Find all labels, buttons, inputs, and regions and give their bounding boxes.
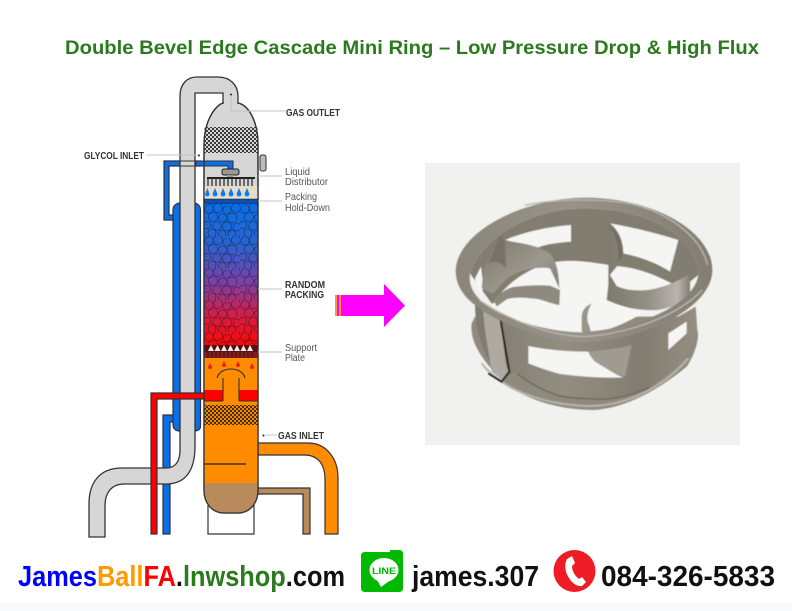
side nozzle [260, 155, 266, 171]
label: gas outlet: GAS OUTLET [286, 107, 340, 119]
left side gap [475, 267, 484, 295]
label: liquid distributor: Liquid [285, 167, 310, 178]
random packing bed [204, 204, 258, 345]
pipe crossing lines [180, 161, 195, 166]
petal fold [488, 235, 506, 268]
brown drain pipe [258, 488, 310, 534]
blue jacket [173, 203, 200, 431]
bottom flange [471, 317, 698, 410]
footer: line id: james.307 [411, 561, 539, 593]
lower mesh [204, 405, 258, 425]
icon: LINE: LINE [372, 566, 396, 577]
label: packing hold-down: Hold-Down [285, 203, 330, 214]
icon: LINE [361, 550, 403, 592]
blue drops [205, 188, 250, 196]
label: random packing: PACKING [285, 289, 324, 301]
petal: centre [582, 303, 592, 334]
petal: left lower [493, 285, 560, 307]
back wall [470, 208, 698, 303]
label: gas inlet: GAS INLET [278, 430, 324, 442]
front petal [588, 345, 632, 377]
leader dots [198, 94, 264, 436]
chimney tray [204, 369, 258, 401]
front window [528, 346, 623, 378]
front wall [475, 303, 697, 398]
interior opening [492, 261, 672, 337]
flange highlight [482, 358, 688, 406]
label: random packing: RANDOM [285, 279, 325, 291]
petal: left [482, 235, 559, 294]
tower outline [204, 103, 258, 513]
label: support plate: Support [285, 343, 317, 354]
support plate [204, 345, 258, 358]
label: support plate [285, 343, 317, 364]
arrow [335, 284, 405, 327]
tower shell [204, 103, 258, 513]
lower orange section [204, 358, 258, 483]
label: support plate: Plate [285, 353, 305, 364]
upper blue pipe left [164, 161, 200, 220]
diagram: absorber tower [89, 77, 338, 537]
top rim [456, 198, 712, 342]
rim highlight [480, 200, 708, 337]
baffle [204, 463, 246, 465]
label: random packing [285, 279, 325, 301]
seam black edge [488, 317, 509, 382]
beige spray zone [204, 186, 258, 199]
grey overhead pipe [89, 77, 238, 537]
seam tab [483, 310, 508, 380]
skirt [208, 505, 254, 534]
red pipe [151, 393, 204, 534]
red drops [208, 361, 254, 369]
label: packing hold-down [285, 192, 330, 214]
icon: phone [554, 550, 596, 592]
leader lines [147, 96, 286, 435]
top mesh demister [204, 127, 258, 153]
label: packing hold-down: Packing [285, 192, 317, 203]
brown sump [204, 483, 258, 512]
back window left [505, 225, 571, 247]
bottom strip [0, 603, 792, 611]
wall shadow line [517, 373, 650, 399]
neck cover [224, 95, 237, 109]
right small window [668, 322, 687, 350]
footer: phone number: 084-326-5833 [601, 561, 775, 593]
product photo: cascade mini ring [425, 163, 740, 445]
back window right [610, 223, 678, 272]
lower blue pipe [163, 415, 175, 534]
label: liquid distributor: Distributor [285, 177, 329, 188]
label: liquid distributor [285, 167, 329, 188]
footer: website: JamesBallFA.lnwshop.com [18, 561, 345, 593]
petal: right [607, 223, 690, 310]
title: Double Bevel Edge Cascade Mini Ring – Low Pressure Drop & High Flux [65, 37, 759, 59]
label: glycol inlet: GLYCOL INLET [84, 150, 144, 162]
orange gas inlet pipe [258, 443, 338, 534]
packing hold-down [204, 199, 258, 204]
petal right fold [608, 223, 622, 262]
liquid distributor [207, 169, 255, 186]
upper blue pipe right [196, 161, 233, 170]
